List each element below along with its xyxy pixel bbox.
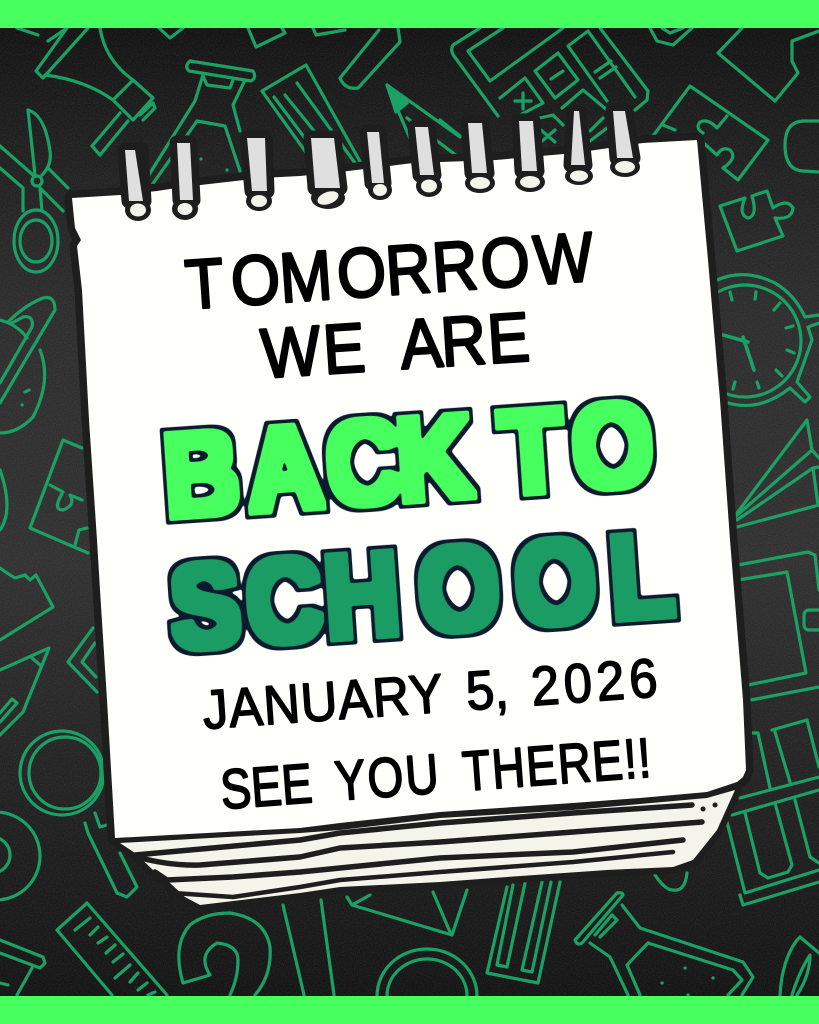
icon: number two xyxy=(179,913,270,995)
icon: bottom left shape xyxy=(0,940,45,995)
ring 1 xyxy=(125,150,151,221)
icon: rounded shape xyxy=(68,628,97,692)
icon: flask bottom xyxy=(575,893,753,995)
ring 9 xyxy=(565,111,593,185)
icon: pencil xyxy=(340,28,400,88)
icon: leaf xyxy=(780,937,819,995)
sign-off: SEE xyxy=(218,752,315,821)
icon: flask xyxy=(147,61,255,185)
icon: tablet xyxy=(738,552,819,700)
sign-off: THERE!! xyxy=(460,726,654,803)
icon: protractor xyxy=(377,949,477,996)
icon: pencil lower xyxy=(0,648,49,735)
icon: puzzle piece xyxy=(653,86,768,180)
icon: puzzle small xyxy=(720,191,793,251)
icon: vertical ruler xyxy=(283,900,334,995)
ring 4 xyxy=(311,138,345,209)
icon: magnifier xyxy=(20,731,137,897)
icon: torn paper xyxy=(718,28,819,101)
icon: books xyxy=(262,65,362,172)
ring 7 xyxy=(465,123,495,193)
spiral rings xyxy=(125,111,640,221)
icon: curve left xyxy=(0,470,7,530)
ring 2 xyxy=(172,143,198,220)
icon: megaphone xyxy=(17,28,345,155)
heading: we are: WE ARE xyxy=(259,299,532,394)
lower page stack xyxy=(120,790,735,905)
top green band xyxy=(0,0,819,28)
icon: small ellipse xyxy=(655,873,687,890)
paper sheet xyxy=(72,140,746,838)
notepad xyxy=(72,140,746,905)
date: 5, xyxy=(464,658,510,723)
ring 6 xyxy=(415,127,442,197)
icon: calculator xyxy=(452,28,648,142)
icon: ring xyxy=(785,121,819,172)
sign-off: YOU xyxy=(333,742,443,812)
icon: scissors xyxy=(0,110,68,272)
title: school: SCHOOL xyxy=(166,508,678,674)
date: JANUARY xyxy=(201,663,446,741)
icon: ruler xyxy=(57,903,167,995)
page stack shadow xyxy=(120,790,735,905)
icon: clock xyxy=(689,275,819,405)
icon: book bottom xyxy=(487,882,560,983)
ring 5 xyxy=(367,132,392,200)
icon: set square xyxy=(387,85,460,157)
heading: tomorrow: TOMORROW xyxy=(183,219,596,325)
icon: circle left xyxy=(0,812,40,900)
icon: bitten shape xyxy=(0,568,53,640)
ring 8 xyxy=(515,121,545,192)
icon: puzzle left xyxy=(30,440,88,553)
date: 2026 xyxy=(529,647,664,718)
icon: planet xyxy=(0,298,55,433)
icon: triangle xyxy=(347,890,467,935)
bottom green band xyxy=(0,996,819,1024)
icon: test tube rack xyxy=(727,720,819,905)
ring 3 xyxy=(246,138,272,211)
icon: ink blob xyxy=(650,28,692,45)
icon: paper plane xyxy=(735,420,819,527)
title: back to: BACK TO xyxy=(159,377,657,542)
ring 10 xyxy=(610,111,640,177)
